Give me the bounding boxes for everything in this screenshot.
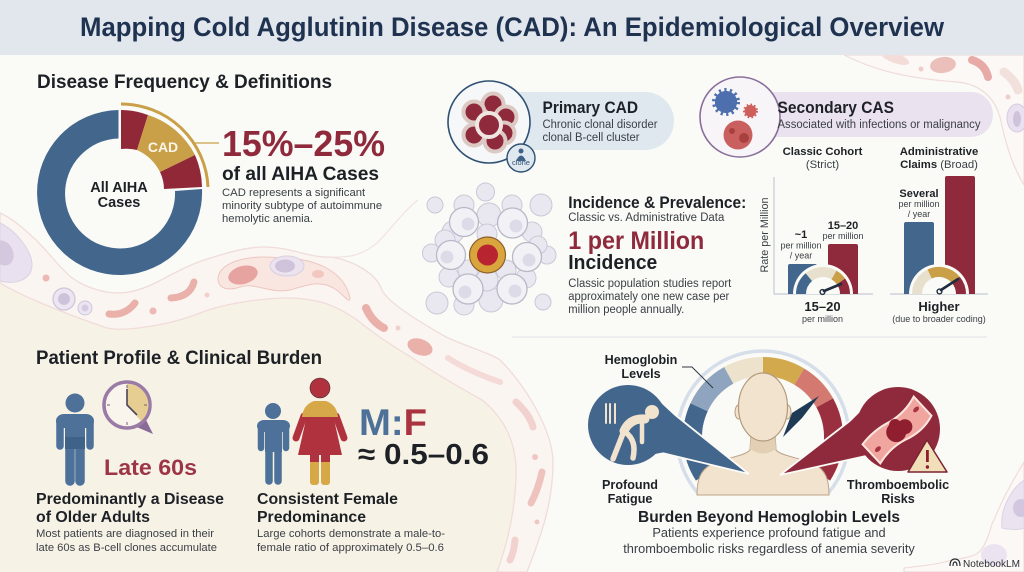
text block: incidence and prevalence: Incidence & Prevalence:: [568, 194, 746, 212]
secondary CAS description: Associated with infections or malignancy: [778, 119, 981, 131]
stat subhead: of all AIHA Cases: [222, 163, 379, 185]
icon: virus and tumor cell: [700, 77, 780, 157]
icon: fatigued person: [606, 404, 659, 459]
key figure label: Incidence: [568, 252, 657, 274]
value: higher: (due to broader coding): [892, 314, 986, 324]
description: approximately one new case per: [568, 291, 729, 303]
callout line: [195, 142, 219, 144]
bubble: thromboembolic risks: [780, 387, 947, 475]
primary CAD text: Primary CAD: [542, 99, 638, 117]
stat description: minority subtype of autoimmune: [222, 200, 382, 212]
subhead: burden: Burden Beyond Hemoglobin Levels: [638, 509, 900, 526]
heading: patient profile: Patient Profile & Clinical Burden: [36, 347, 322, 369]
bar: classic blue: [788, 264, 817, 294]
subhead: female: Consistent Female: [257, 491, 398, 508]
label: thromboembolic risks: Thromboembolic: [847, 478, 949, 492]
value: higher: Higher: [918, 299, 960, 314]
icon: male figure: [56, 394, 94, 481]
bar: administrative blue: [904, 222, 934, 294]
label: 15-20: per million: [822, 231, 864, 241]
description: older adults: late 60s as B-cell clones accumulate: [36, 542, 217, 554]
subhead: older adults: Predominantly a Disease: [36, 491, 224, 508]
donut center label: All AIHA: [90, 180, 148, 196]
label: several: / year: [908, 209, 930, 219]
panel: burden beyond hemoglobin: [588, 351, 949, 556]
bar: classic red: [828, 244, 858, 294]
chart heading: Classic Cohort: [783, 146, 863, 158]
gauge: classic: [793, 264, 853, 294]
label: several: per million: [898, 199, 940, 209]
panel: secondary CAS: [700, 77, 993, 157]
label: profound fatigue: Profound: [602, 478, 658, 492]
human silhouette: [697, 373, 829, 495]
chart: administrative claims: [890, 146, 988, 324]
label: about 1: ~1: [795, 229, 807, 241]
description: burden: thromboembolic risks regardless of anemia severity: [623, 541, 915, 556]
stat description: CAD represents a significant: [222, 187, 366, 199]
axis label: Rate per Million: [759, 198, 771, 272]
chart heading: Administrative: [900, 146, 978, 158]
chart heading: (Strict): [806, 159, 839, 171]
description: female: female ratio of approximately 0.5–0.6: [257, 542, 444, 554]
CAD outer arc: [121, 104, 208, 187]
description: female: Large cohorts demonstrate a male-to-: [257, 528, 445, 540]
description: Classic population studies report: [568, 278, 732, 290]
donut: red upper: [121, 110, 148, 150]
donut: all AIHA blue segment: [37, 110, 202, 275]
subhead: older adults: of Older Adults: [36, 509, 150, 526]
gauge: administrative: [909, 264, 969, 294]
label: profound fatigue: Fatigue: [608, 492, 652, 506]
donut: red lower: [160, 155, 202, 189]
stat: 15-25 percent: 15%–25%: [222, 123, 385, 164]
secondary CAS text: Secondary CAS: [778, 99, 894, 117]
description: older adults: Most patients are diagnosed in their: [36, 528, 214, 540]
donut center label: Cases: [98, 195, 140, 211]
chart heading: Claims (Broad): [900, 159, 978, 171]
NotebookLM mark: NotebookLM: [963, 558, 1020, 570]
heading: disease frequency: Disease Frequency & Definitions: [37, 71, 332, 93]
gauge needle: [783, 396, 819, 437]
hemoglobin label: Levels: [621, 367, 661, 381]
label: several: Several: [899, 188, 939, 200]
chart: classic cohort: [759, 146, 873, 324]
icon: blood vessel with clot: [862, 396, 934, 466]
label: thromboembolic risks: Risks: [881, 492, 915, 506]
bar: administrative red: [945, 176, 975, 294]
panel: female predominance: [257, 378, 489, 554]
title banner: Mapping Cold Agglutinin Disease (CAD): An Epidemiological Overview: [80, 12, 945, 42]
illustration: B-cell surrounding cluster: [422, 183, 556, 315]
description: million people annually.: [568, 304, 684, 316]
central cell: [470, 237, 506, 273]
bubble: profound fatigue: [588, 385, 749, 474]
value: ratio: ≈ 0.5–0.6: [358, 439, 489, 471]
panel: primary CAD: [448, 81, 674, 172]
primary CAD description: clonal B-cell cluster: [542, 132, 640, 144]
label: 15-20: 15–20: [828, 220, 858, 232]
value: 15-20 per million: 15–20: [804, 299, 841, 314]
value: 15-20 per million: per million: [802, 314, 843, 324]
icon: warning triangle: [908, 440, 947, 472]
text block: incidence and prevalence: [568, 194, 746, 316]
label: late 60s: Late 60s: [104, 455, 197, 480]
label: about 1: per million: [780, 240, 822, 250]
icon: clonal cell cluster: [448, 81, 535, 172]
donut label: CAD: CAD: [148, 139, 178, 155]
title banner: [0, 0, 1024, 55]
donut chart: [37, 104, 219, 275]
primary CAD description: Chronic clonal disorder: [542, 119, 658, 131]
clone badge: clone: [512, 158, 530, 167]
hemoglobin label: Hemoglobin: [605, 353, 677, 367]
subhead: female: Predominance: [257, 509, 366, 526]
stat description: hemolytic anemia.: [222, 213, 313, 225]
description: burden: Patients experience profound fatigue and: [652, 525, 886, 540]
label: M:F ratio: M:F: [359, 402, 427, 443]
icon: clock: [104, 382, 153, 434]
donut: CAD gold: [137, 115, 195, 172]
icon: female figure: [296, 378, 344, 485]
stat: 15-25 percent: [222, 123, 385, 225]
icon: male figure small: [257, 403, 290, 481]
leader line: [682, 367, 713, 388]
gauge ring: hemoglobin levels: [677, 351, 849, 493]
key figure: 1 per Million: [568, 227, 704, 255]
label: about 1: / year: [790, 250, 812, 260]
subtitle: Classic vs. Administrative Data: [568, 212, 725, 224]
panel: older adults: [36, 382, 224, 554]
